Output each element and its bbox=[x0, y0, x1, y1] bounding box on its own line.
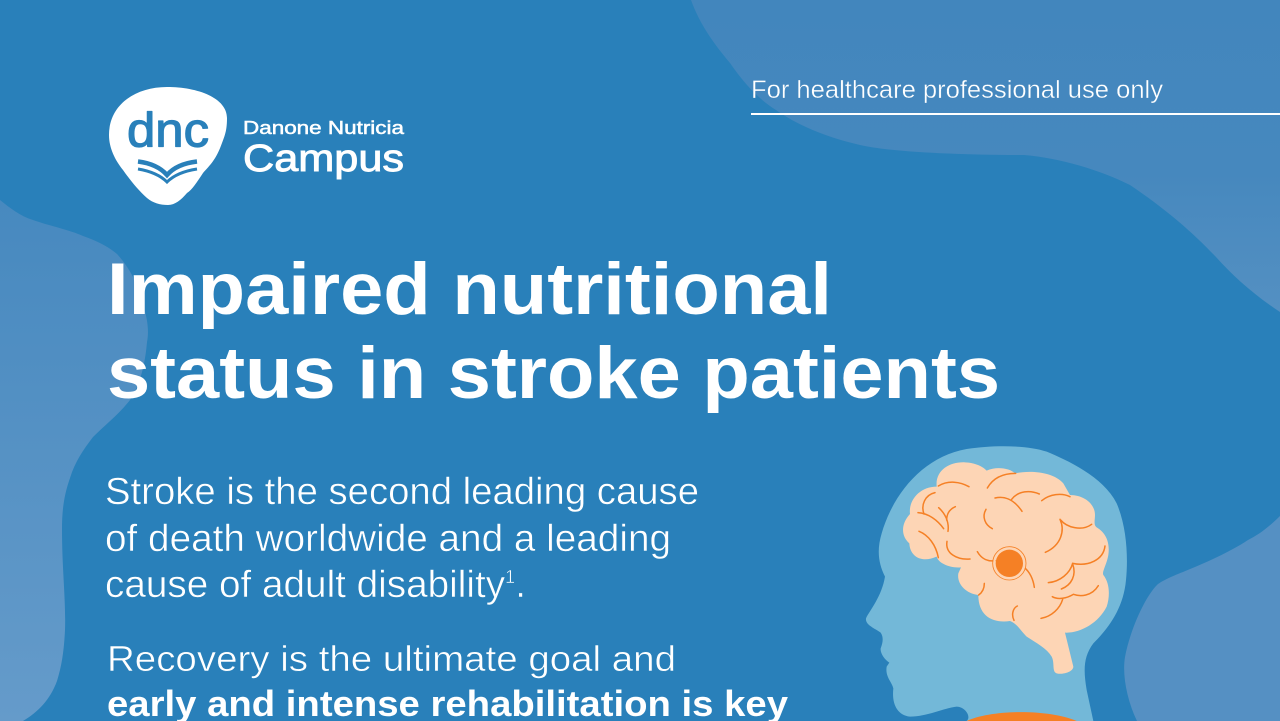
blob: left bbox=[0, 200, 148, 721]
intro text: . bbox=[515, 564, 526, 606]
recovery text bbox=[107, 638, 788, 721]
intro text bbox=[105, 471, 699, 606]
logo wordmark: Danone Nutricia bbox=[243, 117, 405, 138]
stroke marker bbox=[996, 550, 1023, 577]
intro text: cause of adult disability bbox=[105, 564, 498, 606]
logo wordmark: Campus bbox=[243, 138, 404, 180]
recovery text: Recovery is the ultimate goal and bbox=[107, 638, 676, 679]
intro text: 1 bbox=[505, 567, 515, 587]
logo wordmark bbox=[243, 117, 405, 180]
title: Impaired nutritional bbox=[107, 249, 832, 330]
logo book icon bbox=[138, 162, 197, 182]
intro text: Stroke is the second leading cause bbox=[105, 471, 699, 513]
logo letters: dnc bbox=[127, 104, 209, 158]
intro text: of death worldwide and a leading bbox=[105, 518, 671, 560]
blob: top right bbox=[691, 0, 1280, 312]
title bbox=[107, 249, 1000, 414]
illustration: head with brain bbox=[866, 446, 1127, 721]
logo: dnc shield bbox=[109, 87, 227, 205]
brain folds bbox=[918, 473, 1105, 620]
disclaimer: For healthcare professional use only bbox=[751, 76, 1163, 104]
blob: bottom right bbox=[1124, 516, 1280, 721]
orange collar bbox=[967, 712, 1077, 721]
head silhouette bbox=[866, 446, 1127, 721]
title: status in stroke patients bbox=[107, 333, 1000, 414]
brain bbox=[903, 462, 1109, 674]
